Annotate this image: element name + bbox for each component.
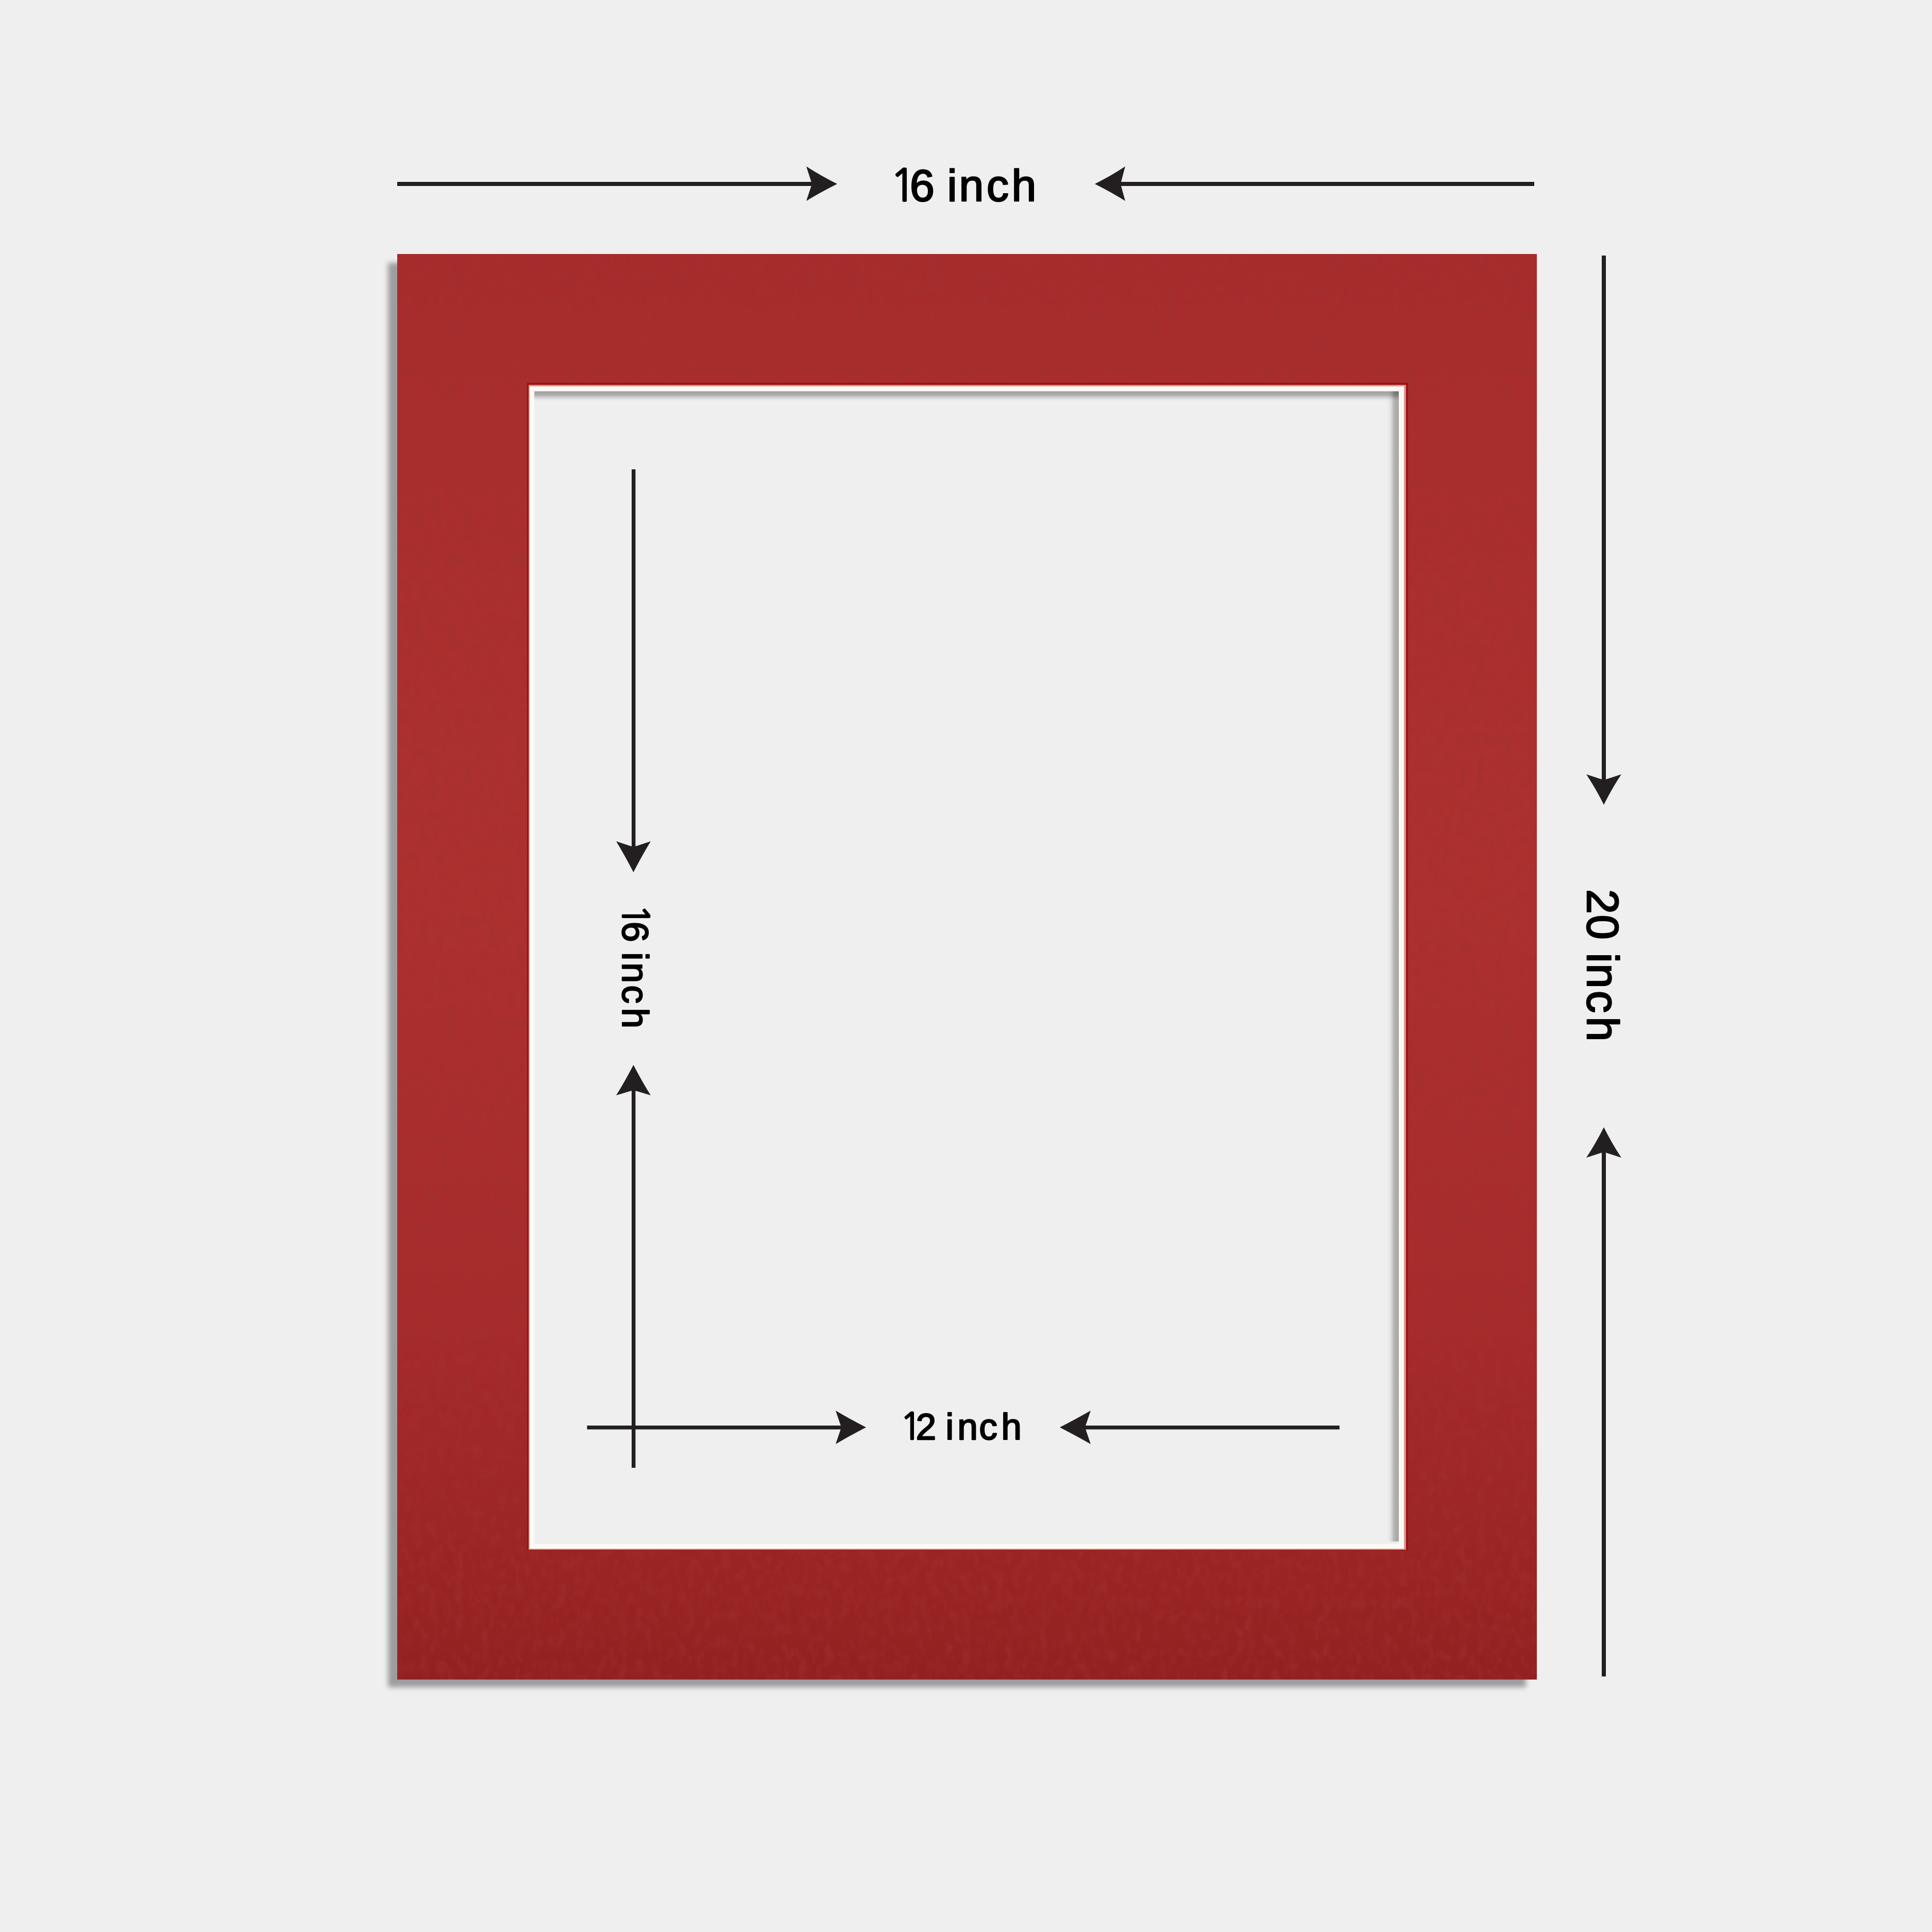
arrow: top left — [397, 166, 837, 201]
arrow: top right — [1095, 166, 1534, 201]
right dimension: 20 inch — [1578, 256, 1627, 1676]
mat drop shadow — [388, 263, 1526, 1687]
red mat surface — [397, 254, 1537, 1680]
mat board — [388, 254, 1537, 1687]
arrow: right upper — [1586, 256, 1621, 805]
arrow: right lower — [1586, 1127, 1621, 1676]
inner width dimension: 12 inch — [587, 1407, 1340, 1448]
arrow: inner right — [1060, 1411, 1340, 1444]
arrow: inner upper — [616, 469, 651, 872]
window opening — [527, 383, 1408, 1550]
label: 20 inch: 20 inch — [1578, 889, 1627, 1041]
label: inner 16 inch: 16 inch — [614, 904, 655, 1028]
top dimension: 16 inch — [397, 161, 1534, 211]
label: 16 inch: 16 inch — [890, 161, 1036, 211]
inner height dimension: 16 inch — [614, 469, 655, 1468]
arrow: inner left — [587, 1411, 866, 1444]
arrow: inner lower — [616, 1065, 651, 1468]
label: 12 inch: 12 inch — [900, 1407, 1022, 1448]
